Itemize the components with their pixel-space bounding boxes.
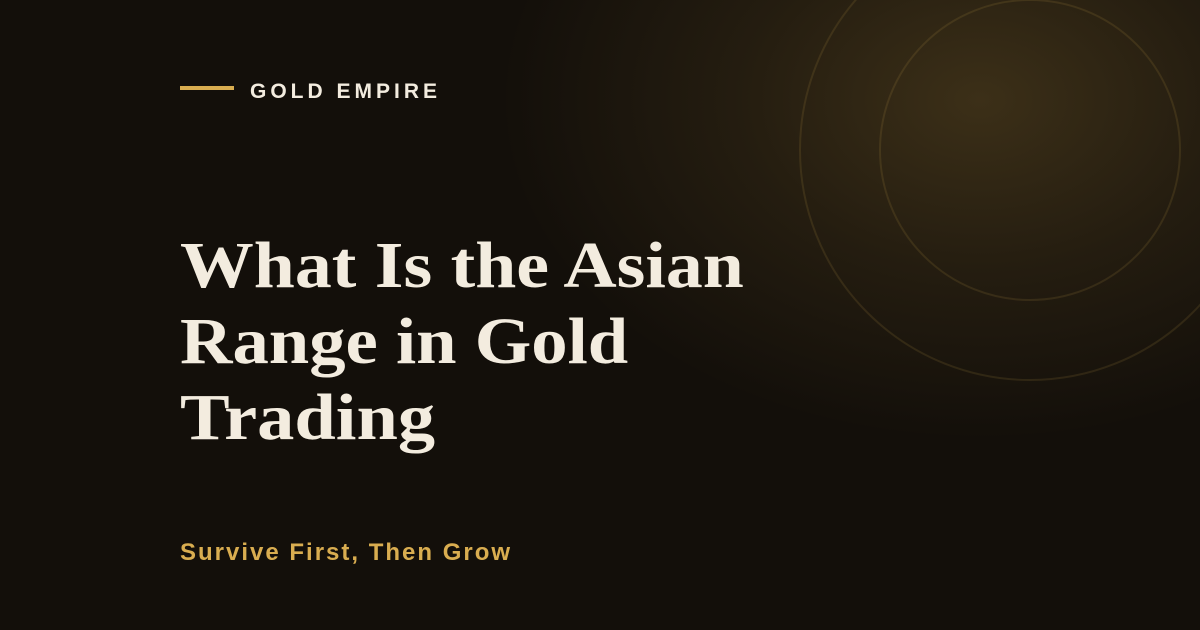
accent rule [180,86,234,90]
decorative outer ring [799,0,1200,381]
tagline: Survive First, Then Grow [180,539,512,566]
title [180,229,744,454]
title: Range in Gold [180,305,628,378]
brand name: GOLD EMPIRE [250,80,441,103]
title: What Is the Asian [180,229,744,302]
decorative inner ring [879,0,1181,301]
title: Trading [180,381,435,454]
